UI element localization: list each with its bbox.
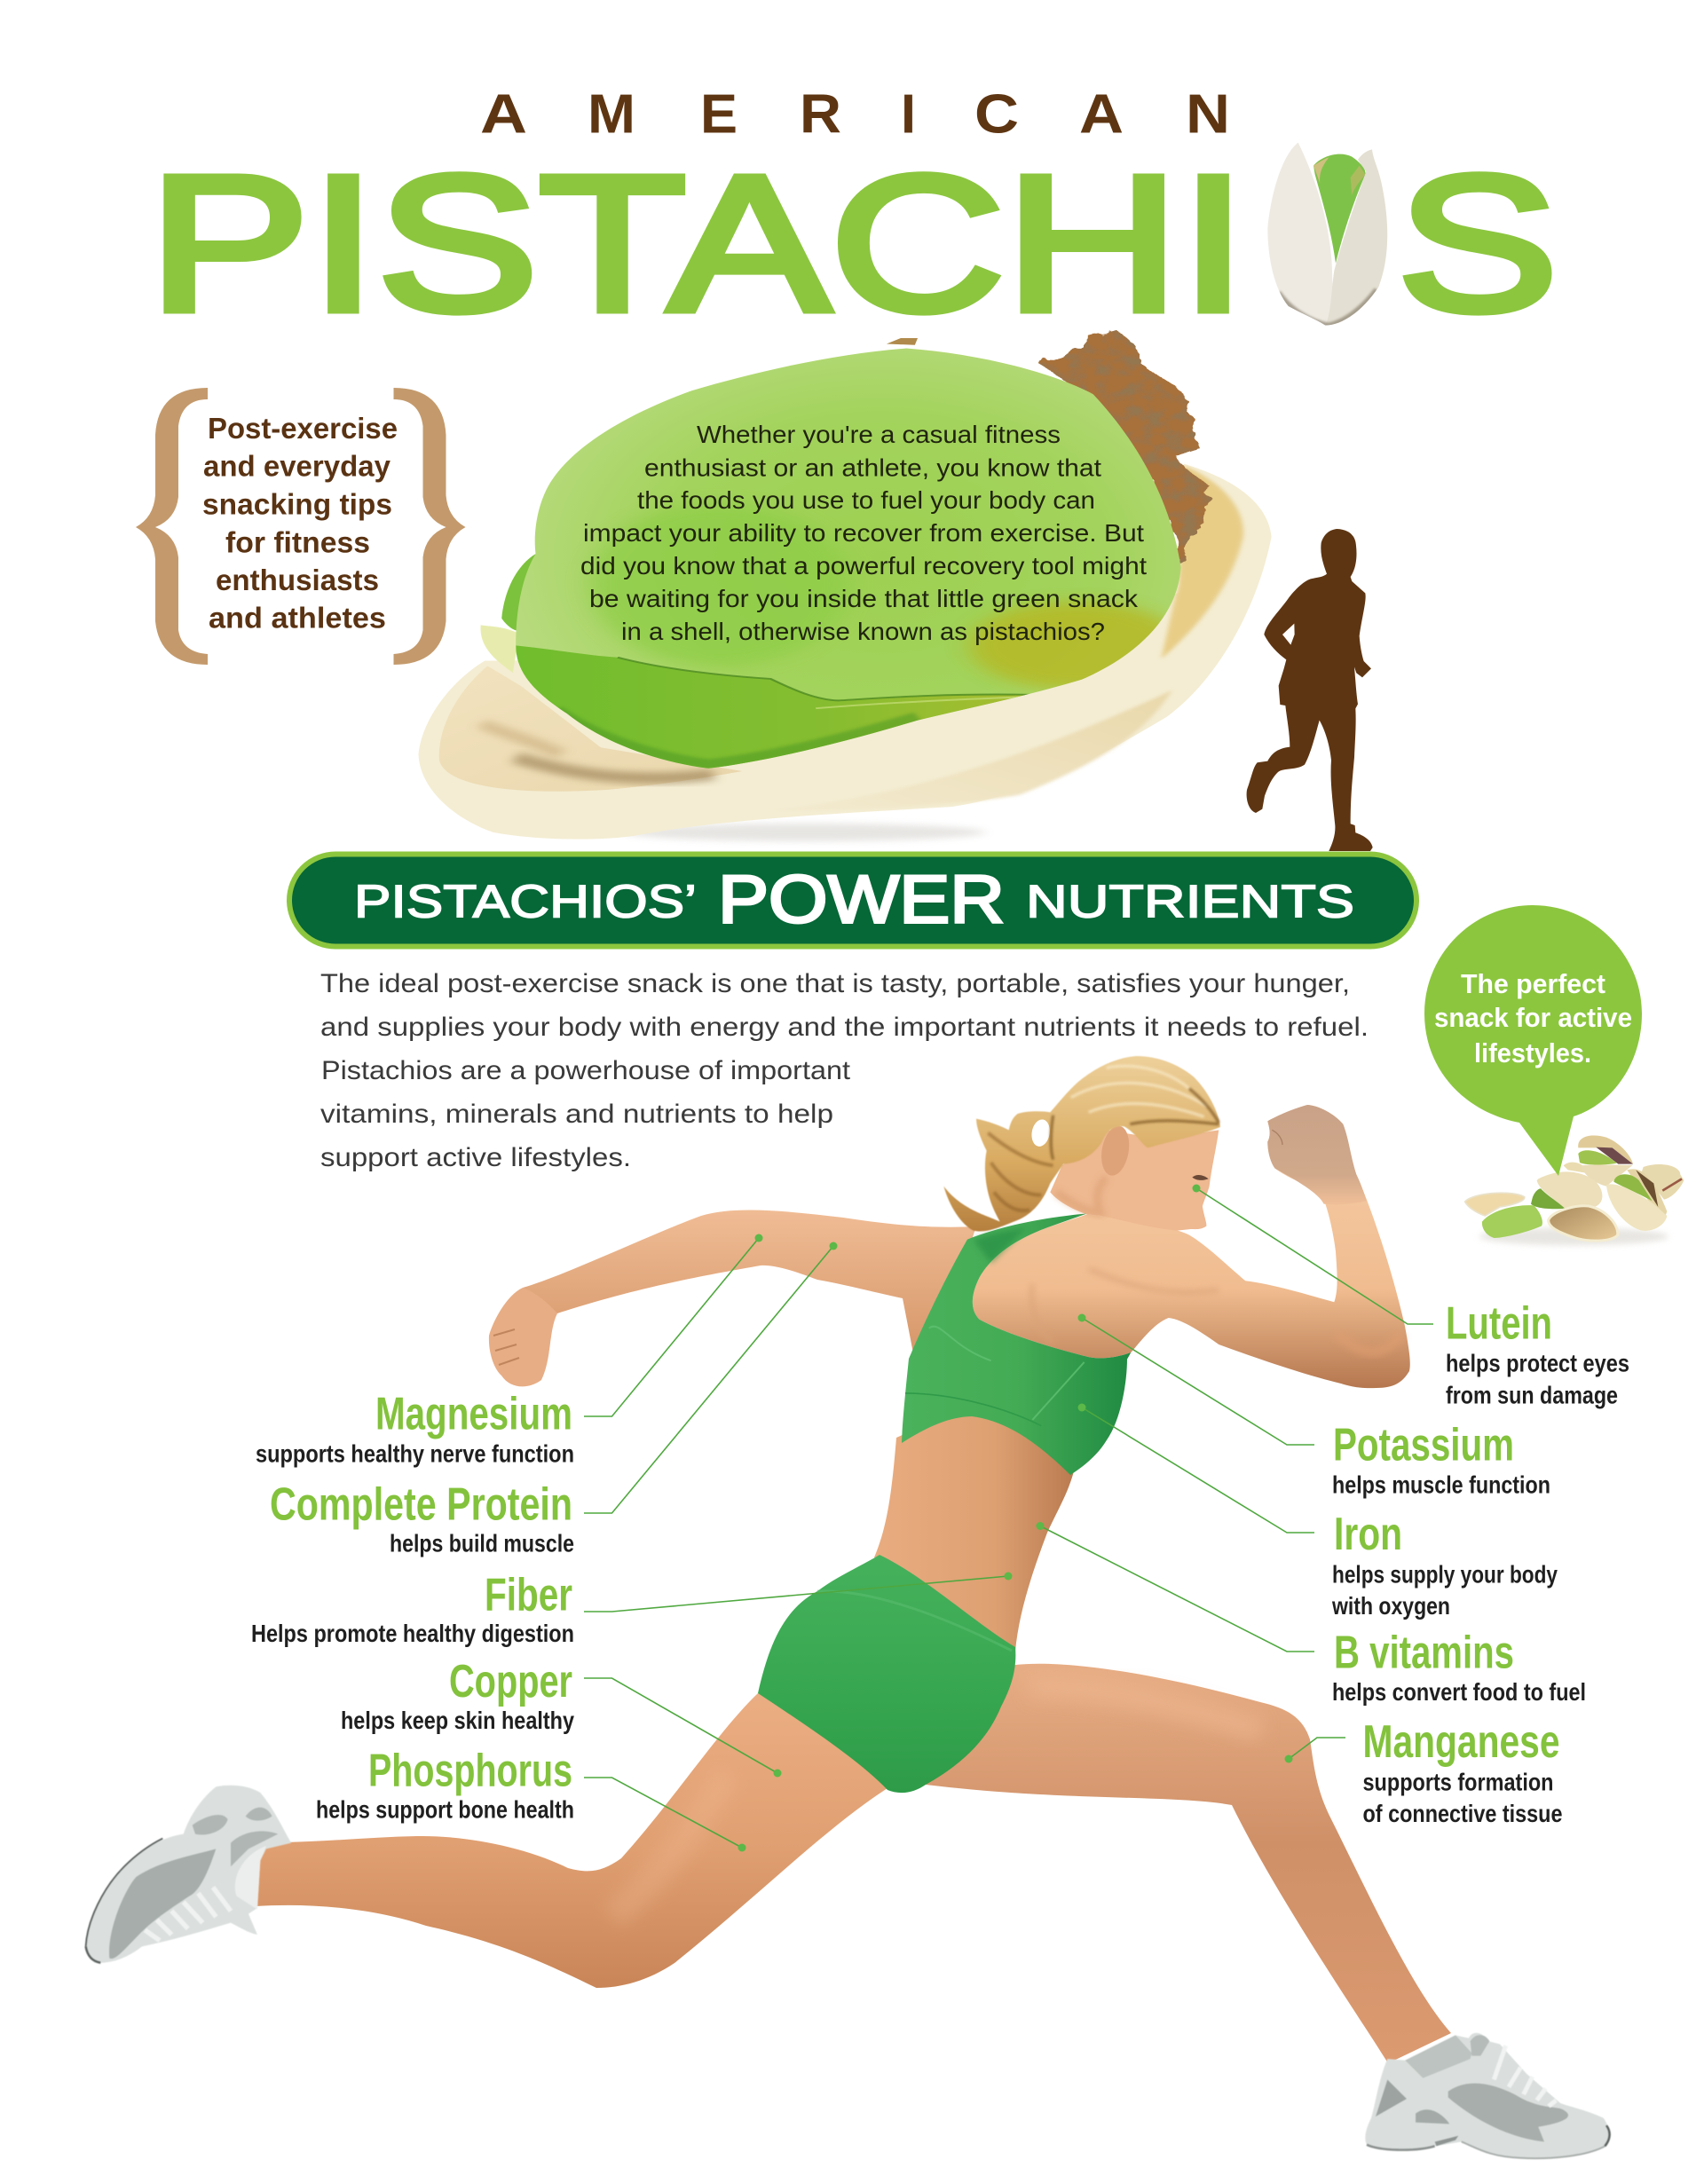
label: Complete Protein: helps build muscle bbox=[390, 1530, 574, 1557]
label: Potassium: Potassium bbox=[1333, 1420, 1514, 1471]
speech bubble: perfect snack bbox=[1424, 905, 1642, 1176]
sports bra bbox=[902, 1213, 1131, 1475]
label: B vitamins: B vitamins bbox=[1334, 1628, 1514, 1679]
label: B vitamins bbox=[1332, 1628, 1586, 1706]
title: Pistachios bbox=[148, 137, 1558, 351]
title: American: N bbox=[1186, 83, 1230, 146]
brace text: post-exercise tips bbox=[136, 388, 465, 665]
paragraph on kernel: enthusiast or an athlete, you know that bbox=[644, 454, 1101, 481]
label: Lutein: helps protect eyes bbox=[1446, 1349, 1629, 1377]
paragraph on kernel: in a shell, otherwise known as pistachios? bbox=[621, 618, 1105, 645]
paragraph on kernel: did you know that a powerful recovery tool might bbox=[580, 552, 1147, 580]
label: Manganese: Manganese bbox=[1363, 1716, 1560, 1768]
label: Fiber: Helps promote healthy digestion bbox=[251, 1620, 574, 1647]
label: Lutein: Lutein bbox=[1446, 1297, 1552, 1349]
label: Potassium bbox=[1332, 1420, 1550, 1498]
leader lines and dots bbox=[584, 1184, 1433, 1851]
banner: Pistachios' Power Nutrients: POWER bbox=[718, 863, 1005, 937]
brace text: post-exercise tips: snacking tips bbox=[202, 488, 392, 520]
illustration: pile of pistachios bbox=[1465, 1135, 1684, 1245]
brace text: post-exercise tips: for fitness bbox=[225, 525, 370, 559]
title: Pistachios: S bbox=[1397, 137, 1558, 351]
label: Magnesium: supports healthy nerve function bbox=[256, 1439, 574, 1468]
front leg bbox=[896, 1664, 1451, 2063]
intro paragraph: support active lifestyles. bbox=[320, 1143, 631, 1172]
speech bubble: perfect snack: lifestyles. bbox=[1474, 1037, 1591, 1068]
label: B vitamins: helps convert food to fuel bbox=[1332, 1678, 1586, 1706]
paragraph on kernel: the foods you use to fuel your body can bbox=[637, 486, 1095, 514]
label: Phosphorus bbox=[316, 1745, 574, 1823]
intro paragraph bbox=[320, 969, 1369, 1172]
rear shoe bbox=[86, 1786, 291, 1963]
label: Magnesium bbox=[256, 1388, 574, 1468]
brace text: post-exercise tips: Post-exercise bbox=[208, 412, 398, 445]
intro paragraph: Pistachios are a powerhouse of important bbox=[321, 1056, 851, 1085]
title: American: I bbox=[901, 83, 916, 146]
label: Complete Protein bbox=[270, 1478, 574, 1557]
intro paragraph: and supplies your body with energy and the important nutrients it needs to refuel. bbox=[320, 1013, 1369, 1042]
label: Copper: helps keep skin healthy bbox=[341, 1707, 574, 1734]
label: Magnesium: Magnesium bbox=[375, 1388, 572, 1439]
illustration: runner woman bbox=[86, 1056, 1610, 2158]
shorts bbox=[758, 1555, 1015, 1793]
brace text: post-exercise tips: enthusiasts bbox=[216, 564, 379, 596]
brace text: post-exercise tips: and athletes bbox=[209, 602, 386, 634]
title: American: A bbox=[480, 83, 527, 146]
label: Lutein bbox=[1446, 1297, 1629, 1409]
midriff bbox=[874, 1402, 1076, 1651]
rear arm bbox=[489, 1210, 976, 1386]
label: Fiber: Fiber bbox=[485, 1569, 572, 1620]
label: Phosphorus: Phosphorus bbox=[368, 1745, 572, 1796]
speech bubble: perfect snack: snack for active bbox=[1434, 1002, 1632, 1033]
paragraph on kernel: be waiting for you inside that little green snack bbox=[589, 585, 1139, 612]
icon: running silhouette bbox=[1247, 529, 1373, 851]
head and hair bbox=[943, 1056, 1220, 1232]
paragraph on kernel: Whether you're a casual fitness bbox=[697, 421, 1061, 448]
label: Iron: helps supply your body bbox=[1332, 1560, 1558, 1589]
banner: Pistachios' Power Nutrients bbox=[289, 854, 1416, 946]
intro paragraph: The ideal post-exercise snack is one that is tasty, portable, satisfies your hunger, bbox=[320, 969, 1350, 998]
banner: Pistachios' Power Nutrients: PISTACHIOS’ bbox=[354, 877, 697, 928]
label: Complete Protein: Complete Protein bbox=[270, 1478, 572, 1530]
title: Pistachios: PISTACHI bbox=[148, 137, 1247, 351]
title: American: C bbox=[974, 83, 1019, 146]
label: Iron: Iron bbox=[1334, 1509, 1402, 1560]
banner: Pistachios' Power Nutrients: NUTRIENTS bbox=[1026, 877, 1354, 928]
label: Manganese bbox=[1363, 1716, 1562, 1827]
front shoe bbox=[1365, 2033, 1610, 2158]
label: Phosphorus: helps support bone health bbox=[316, 1796, 574, 1823]
paragraph on kernel bbox=[580, 421, 1147, 645]
intro paragraph: vitamins, minerals and nutrients to help bbox=[320, 1100, 833, 1129]
label: Manganese: supports formation bbox=[1363, 1768, 1553, 1796]
title: American: R bbox=[800, 83, 841, 146]
brace text: post-exercise tips: and everyday bbox=[203, 449, 391, 483]
illustration: open pistachio with kernel bbox=[418, 329, 1272, 841]
icon: pistachio replacing the letter O bbox=[1267, 143, 1387, 326]
label: Iron bbox=[1331, 1509, 1558, 1620]
title: American bbox=[480, 83, 1230, 146]
label: Copper bbox=[341, 1656, 574, 1734]
label: Iron: with oxygen bbox=[1331, 1592, 1450, 1620]
label: Copper: Copper bbox=[449, 1656, 572, 1707]
label: Fiber bbox=[251, 1569, 574, 1647]
paragraph on kernel: impact your ability to recover from exercise. But bbox=[583, 519, 1144, 547]
rear leg bbox=[256, 1642, 888, 1988]
label: Lutein: from sun damage bbox=[1446, 1381, 1618, 1409]
title: American: M bbox=[588, 83, 635, 146]
title: American: E bbox=[700, 83, 738, 146]
title: American: A bbox=[1079, 83, 1124, 146]
label: Manganese: of connective tissue bbox=[1363, 1800, 1562, 1827]
neck, shoulder and front arm bbox=[973, 1105, 1410, 1388]
label: Potassium: helps muscle function bbox=[1332, 1471, 1550, 1498]
speech bubble: perfect snack: The perfect bbox=[1461, 968, 1605, 999]
